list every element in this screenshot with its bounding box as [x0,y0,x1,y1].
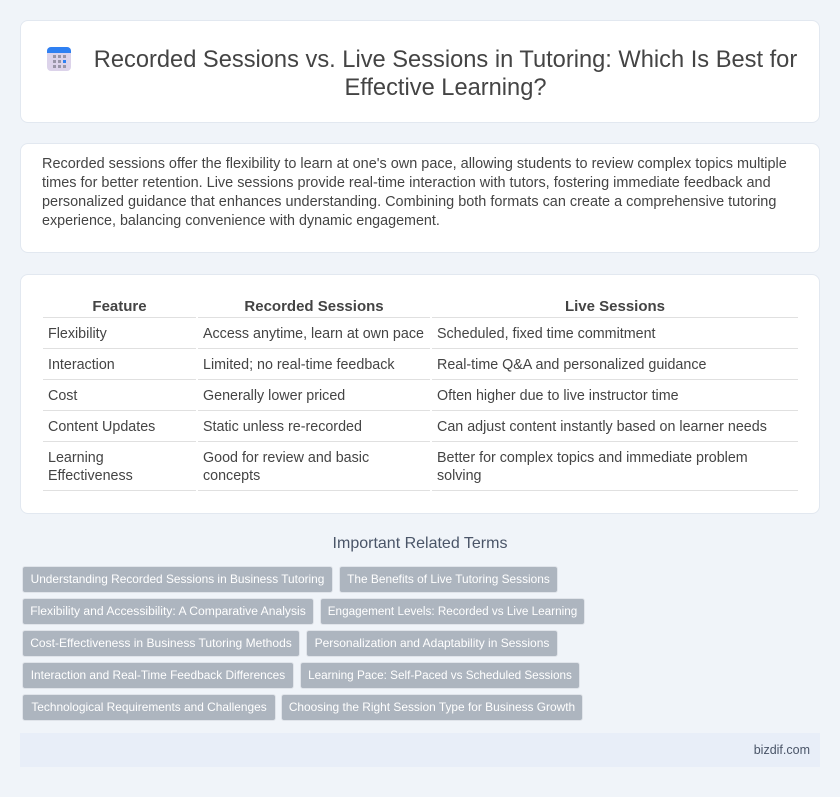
header card [20,20,820,123]
title [94,47,797,101]
row: flexibility: Scheduled, fixed time commitment [437,326,656,342]
row: cost: Often higher due to live instructor time [437,388,679,404]
row: cost: Generally lower priced [203,388,345,404]
row: learning effectiveness: Good for review and basic [203,450,369,466]
row: content updates [48,419,767,435]
related terms heading: Important Related Terms [333,535,507,552]
intro text [42,156,787,229]
row: flexibility: Access anytime, learn at own pace [203,326,424,342]
intro text: Recorded sessions offer the flexibility to learn at one's own pace, allowing students to review complex topics multiple [42,156,787,172]
title: Effective Learning? [344,75,547,101]
table headers: Feature [92,298,147,315]
related terms tags: Flexibility and Accessibility: A Comparative Analysis [30,604,306,618]
icon: calendar [47,47,71,71]
intro text: personalized guidance that enhances understanding. Combining both formats can create a comprehensive tutoring [42,194,776,210]
title: Recorded Sessions vs. Live Sessions in Tutoring: Which Is Best for [94,47,797,73]
related terms tags: Technological Requirements and Challenges [31,700,267,714]
row: learning effectiveness: Effectiveness [48,468,133,484]
related terms tags: Cost-Effectiveness in Business Tutoring Methods [30,636,292,650]
related terms tags: Learning Pace: Self-Paced vs Scheduled Sessions [308,669,572,682]
related terms tags: Personalization and Adaptability in Sessions [315,636,549,650]
row: interaction: Real-time Q&A and personalized guidance [437,357,706,373]
related terms tags: Understanding Recorded Sessions in Business Tutoring [31,572,324,586]
row: interaction [48,357,706,373]
row: interaction: Limited; no real-time feedback [203,357,395,373]
table headers: Recorded Sessions [244,298,384,315]
row: content updates: Static unless re-recorded [203,419,362,435]
related terms tags: Interaction and Real-Time Feedback Differences [31,668,285,682]
row: content updates: Content Updates [48,419,155,435]
footer brand: bizdif.com [754,743,810,757]
row: flexibility [48,326,656,342]
row: flexibility: Flexibility [48,326,107,342]
intro text: experience, balancing convenience with dynamic engagement. [42,213,440,229]
footer [20,733,820,767]
related terms tags: Engagement Levels: Recorded vs Live Learning [328,605,577,618]
related terms tags: Choosing the Right Session Type for Business Growth [289,700,575,714]
row: learning effectiveness: solving [437,468,482,484]
row: cost: Cost [48,388,77,404]
table headers [92,298,665,315]
intro paragraph card [20,143,820,253]
row: interaction: Interaction [48,357,115,373]
row: learning effectiveness [48,450,748,484]
row: learning effectiveness: Learning [48,450,104,466]
row: cost [48,388,679,404]
row: learning effectiveness: Better for complex topics and immediate problem [437,450,748,466]
table headers: Live Sessions [565,298,665,315]
intro text: times for better retention. Live sessions provide real-time interaction with tutors, fostering immediate feedback and [42,175,771,191]
related terms tags: The Benefits of Live Tutoring Sessions [347,572,550,586]
related terms tags [22,566,585,721]
row: content updates: Can adjust content instantly based on learner needs [437,419,767,435]
row: learning effectiveness: concepts [203,468,260,484]
comparison table card [20,274,820,514]
